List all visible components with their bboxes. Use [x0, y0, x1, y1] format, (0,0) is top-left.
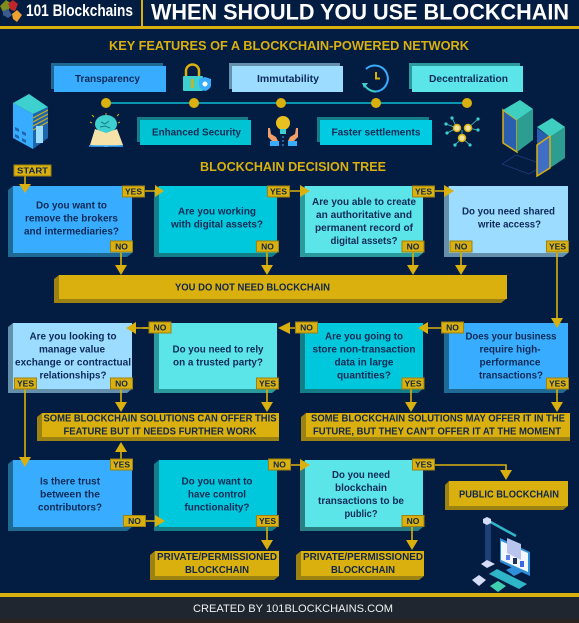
- question: value exchange: [8, 323, 132, 393]
- row 2 arrows and labels: NO: [154, 322, 167, 332]
- question: trusted party: Do you need to rely: [172, 344, 264, 356]
- question: value exchange: relationships?: [40, 370, 106, 382]
- question: trusted party: on a trusted party?: [173, 358, 263, 368]
- row 2 arrows and labels: YES: [404, 378, 422, 388]
- feature: Transparency: [51, 63, 166, 92]
- question: remove brokers: Do you want to: [36, 200, 107, 212]
- feature: Enhanced Security: [137, 117, 251, 145]
- question: non-transaction data: quantities?: [337, 370, 391, 382]
- row 2 arrows and labels: YES: [549, 378, 566, 388]
- row 3 arrows and labels: NO: [407, 516, 420, 526]
- question: authoritative record: [300, 186, 423, 257]
- icon: clock: [362, 66, 388, 92]
- question: value exchange: exchange or contractual: [15, 358, 131, 368]
- question: authoritative record: an authoritative and: [316, 210, 412, 221]
- result: public blockchain: [445, 481, 568, 510]
- row 3 arrows and labels: YES: [259, 516, 276, 526]
- icon: network: [444, 116, 480, 147]
- result: private blockchain right: PRIVATE/PERMISSIONED: [303, 552, 423, 563]
- heading: decision tree: BLOCKCHAIN DECISION TREE: [200, 160, 386, 174]
- row 2 arrows and labels: YES: [259, 378, 276, 388]
- row 1 arrows and labels: YES: [549, 242, 566, 252]
- logo cubes: [0, 0, 22, 22]
- question: non-transaction data: data in large: [334, 358, 394, 368]
- feature: Transparency: Transparency: [75, 74, 140, 85]
- result: you do not need blockchain: YOU DO NOT NEED BLOCKCHAIN: [175, 282, 330, 294]
- question: high-performance: require high-: [480, 344, 540, 356]
- question: high-performance: [444, 323, 568, 393]
- feature: Decentralization: [409, 63, 523, 92]
- question: high-performance: Does your business: [466, 332, 557, 342]
- title: WHEN SHOULD YOU USE BLOCKCHAIN: [151, 0, 569, 24]
- question: trust between contributors: between the: [40, 490, 100, 500]
- result: private blockchain left: [150, 551, 279, 580]
- question: control functionality: functionality?: [184, 502, 250, 514]
- feature: Faster settlements: Faster settlements: [332, 128, 421, 138]
- question: public transactions: [300, 460, 423, 531]
- result: private blockchain left: BLOCKCHAIN: [185, 565, 249, 576]
- header: [0, 0, 579, 29]
- question: trust between contributors: [8, 460, 132, 531]
- row 1 arrows and labels: YES: [270, 186, 287, 196]
- feature: Immutability: [229, 63, 343, 92]
- result: can offer with further work: SOME BLOCKCHAIN SOLUTIONS CAN OFFER THIS: [44, 414, 277, 424]
- result: private blockchain right: [296, 551, 424, 580]
- row 1 arrows and labels: NO: [407, 242, 420, 252]
- icon: lock: [183, 65, 211, 91]
- footer credit: CREATED BY 101BLOCKCHAINS.COM: [193, 603, 393, 615]
- icon: hands and bulb: [268, 116, 298, 146]
- question: public transactions: public?: [344, 509, 378, 520]
- heading: key features: KEY FEATURES OF A BLOCKCHAIN-POWERED NETWORK: [109, 39, 469, 53]
- footer: [0, 593, 579, 623]
- feature: Immutability: Immutability: [257, 74, 319, 85]
- question: control functionality: have control: [188, 490, 246, 500]
- row 1 arrows and labels: NO: [455, 242, 468, 252]
- row 3 arrows and labels: NO: [273, 460, 286, 470]
- row 3 arrows and labels: YES: [113, 460, 130, 470]
- question: high-performance: transactions?: [479, 370, 543, 382]
- question: remove brokers: remove the brokers: [25, 214, 118, 224]
- result: may offer in the future: SOME BLOCKCHAIN SOLUTIONS MAY OFFER IT IN THE: [311, 414, 565, 424]
- question: public transactions: Do you need: [332, 470, 390, 481]
- question: value exchange: Are you looking to: [30, 332, 116, 342]
- question: non-transaction data: store non-transaction: [312, 344, 416, 356]
- feature: Faster settlements: [317, 117, 432, 145]
- row 1 arrows and labels: YES: [125, 186, 142, 196]
- question: non-transaction data: [300, 323, 423, 393]
- question: trust between contributors: Is there trust: [40, 476, 101, 488]
- question: digital assets: [154, 186, 277, 257]
- feature: Decentralization: Decentralization: [429, 74, 508, 85]
- icon: server left: [13, 94, 48, 149]
- icon: book and brain: [89, 113, 123, 147]
- row 2 arrows and labels: NO: [115, 378, 128, 388]
- question: digital assets: Are you working: [178, 206, 256, 218]
- row 1 arrows and labels: YES: [415, 186, 432, 196]
- feature: Enhanced Security: Enhanced Security: [152, 128, 241, 138]
- row 2 arrows and labels: NO: [300, 322, 313, 332]
- question: non-transaction data: Are you going to: [325, 332, 403, 342]
- question: shared write access: [444, 186, 568, 257]
- start label: START: [17, 166, 49, 176]
- result: can offer with further work: [37, 413, 279, 441]
- row 3 arrows and labels: YES: [415, 460, 432, 470]
- question: public transactions: blockchain: [335, 483, 387, 494]
- row 3 arrows and labels: NO: [128, 516, 141, 526]
- row 2 arrows and labels: YES: [17, 378, 34, 388]
- result: may offer in the future: FUTURE, BUT THEY CAN'T OFFER IT AT THE MOMENT: [313, 426, 561, 438]
- icon: servers right: [502, 100, 565, 176]
- question: shared write access: write access?: [477, 220, 541, 230]
- result: you do not need blockchain: [54, 275, 507, 303]
- question: control functionality: [154, 460, 277, 531]
- question: control functionality: Do you want to: [182, 476, 252, 488]
- question: public transactions: transactions to be: [318, 496, 404, 507]
- row 3 arrows and labels: [110, 459, 512, 550]
- question: authoritative record: permanent record of: [315, 223, 414, 234]
- row 1 arrows and labels: NO: [261, 242, 274, 252]
- question: value exchange: manage value: [39, 344, 105, 356]
- start label: [14, 165, 51, 193]
- question: shared write access: Do you need shared: [462, 206, 555, 218]
- row 1 arrows and labels: NO: [115, 242, 128, 252]
- result: private blockchain right: BLOCKCHAIN: [331, 565, 395, 576]
- question: authoritative record: digital assets?: [330, 236, 398, 247]
- logo text: 101 Blockchains: [26, 1, 133, 20]
- question: remove brokers: [8, 186, 132, 257]
- question: authoritative record: Are you able to create: [312, 197, 416, 208]
- row 1 arrows and labels: [110, 185, 568, 328]
- result: private blockchain left: PRIVATE/PERMISSIONED: [157, 552, 277, 563]
- icon: developer illustration: [472, 517, 530, 592]
- result: can offer with further work: FEATURE BUT IT NEEDS FURTHER WORK: [64, 426, 257, 438]
- result: public blockchain: PUBLIC BLOCKCHAIN: [459, 490, 559, 500]
- question: digital assets: with digital assets?: [170, 220, 263, 230]
- question: trusted party: [154, 323, 277, 393]
- question: remove brokers: and intermediaries?: [24, 226, 119, 238]
- question: trust between contributors: contributors?: [38, 502, 102, 514]
- row 2 arrows and labels: NO: [446, 322, 459, 332]
- feature timeline: [101, 98, 472, 108]
- result: may offer in the future: [301, 413, 570, 441]
- row 2 arrows and labels: [14, 322, 568, 467]
- question: high-performance: performance: [480, 358, 541, 368]
